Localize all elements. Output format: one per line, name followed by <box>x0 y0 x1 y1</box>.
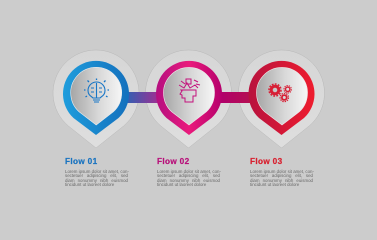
icon: head with ideas <box>179 79 200 102</box>
pin 1 inner disc <box>71 67 122 125</box>
heading: Flow 01: Flow 01 <box>65 157 97 166</box>
body: Flow 02 <box>157 168 221 187</box>
heading: Flow 03: Flow 03 <box>250 157 282 166</box>
pin 1 outer shell <box>53 50 139 148</box>
icon: gears <box>269 84 291 102</box>
body: Flow 01: diam nonummy nibh euismod <box>65 178 128 183</box>
body: Flow 03: sectetuer adipiscing elit, sed <box>250 173 313 178</box>
connector 2 to 3 <box>218 92 252 103</box>
pin 2 magenta ring <box>156 61 222 135</box>
body: Flow 03: tincidunt ut laoreet dolore <box>250 182 299 187</box>
text block: Flow 02 <box>157 157 221 187</box>
body: Flow 01: sectetuer adipiscing elit, sed <box>65 173 128 178</box>
text block: Flow 01 <box>65 157 129 187</box>
body: Flow 02: Lorem ipsum dolor sit amet, con- <box>157 168 221 174</box>
body: Flow 01: Lorem ipsum dolor sit amet, con- <box>65 168 129 174</box>
connector 1 to 2 <box>125 92 161 103</box>
heading: Flow 02: Flow 02 <box>157 157 189 166</box>
body: Flow 02: tincidunt ut laoreet dolore <box>157 182 206 187</box>
pin 3 outer shell <box>238 50 324 148</box>
body: Flow 03: Lorem ipsum dolor sit amet, con- <box>250 168 314 174</box>
body: Flow 03: diam nonummy nibh euismod <box>250 178 313 183</box>
body: Flow 02: diam nonummy nibh euismod <box>157 178 220 183</box>
body: Flow 01: tincidunt ut laoreet dolore <box>65 182 114 187</box>
pin 2 inner disc <box>164 67 214 125</box>
pin 3 red ring <box>249 61 314 135</box>
body: Flow 01 <box>65 168 129 187</box>
pin 3 inner disc <box>257 67 308 125</box>
text block: Flow 03 <box>250 157 314 187</box>
pin 2 outer shell <box>146 50 232 148</box>
body: Flow 03 <box>250 168 314 187</box>
pin 1 blue ring <box>63 61 129 135</box>
body: Flow 02: sectetuer adipiscing elit, sed <box>157 173 220 178</box>
icon: lightbulb brain <box>84 78 109 102</box>
